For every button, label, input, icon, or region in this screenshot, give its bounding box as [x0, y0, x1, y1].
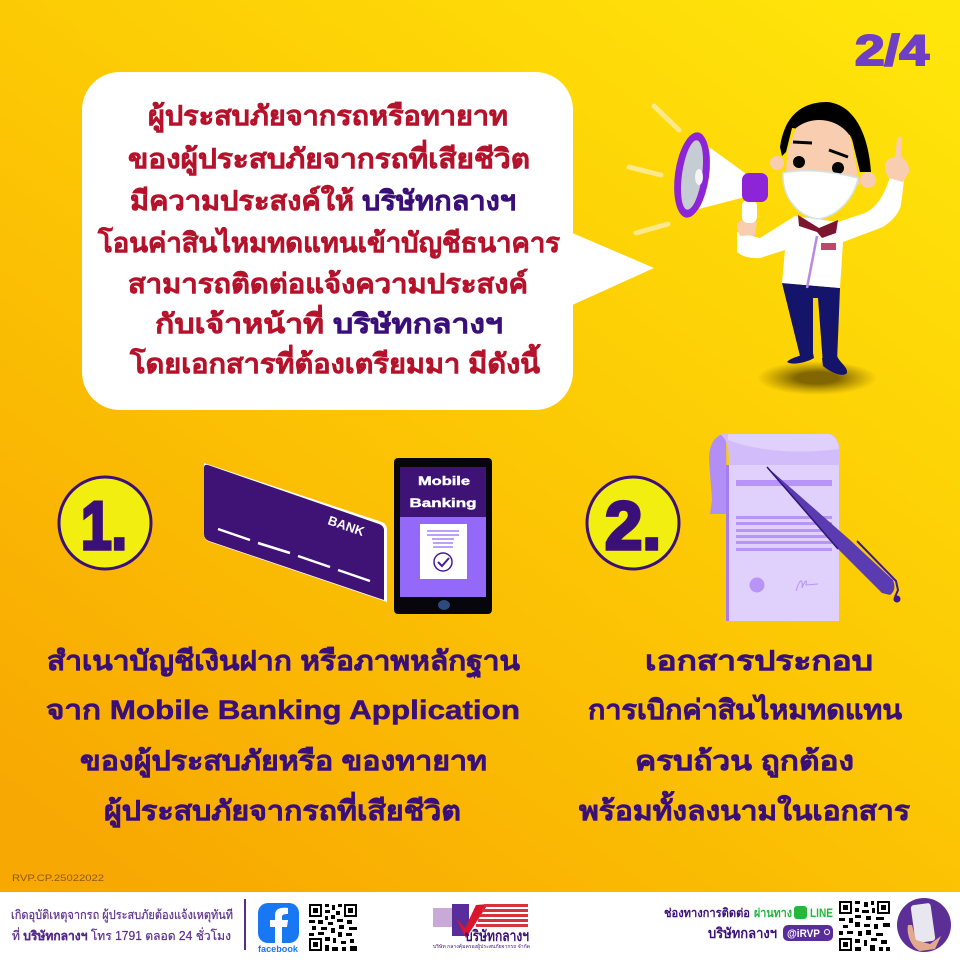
bubble text: สามารถติดต่อแจ้งความประสงค์: [128, 268, 528, 299]
step 1 text: [46, 646, 521, 828]
step 2 badge: 2.: [605, 488, 661, 564]
step 1 text: สำเนาบัญชีเงินฝาก หรือภาพหลักฐาน: [47, 646, 521, 679]
bubble text: โอนค่าสินไหมทดแทนเข้าบัญชีธนาคาร: [97, 226, 561, 259]
footer notice: [11, 908, 233, 943]
shirt and arms: [737, 177, 904, 288]
iRVP pill: [783, 925, 833, 941]
icon: facebook: [258, 903, 299, 954]
megaphone: [737, 219, 757, 236]
step 2 text: เอกสารประกอบ: [645, 646, 873, 676]
bubble text: [97, 101, 561, 379]
reference code: RVP.CP.25022022: [12, 873, 104, 884]
LINE contact: ช่องทางการติดต่อ: [664, 906, 750, 920]
logo: RVP: บริษัท กลางคุ้มครองผู้ประสบภัยจากรถ จำกัด: [433, 943, 530, 950]
icon: man with megaphone: [629, 102, 909, 395]
icon: bank book: [204, 463, 387, 602]
footer notice: ที่ บริษัทกลางฯ โทร 1791 ตลอด 24 ชั่วโมง: [12, 927, 231, 943]
step 2 badge: [587, 477, 679, 569]
icon: phone in hand circle: [897, 898, 951, 952]
trousers and shoes: [782, 283, 840, 364]
step 1 text: ของผู้ประสบภัยหรือ ของทายาท: [80, 746, 487, 778]
footer: [0, 892, 960, 960]
mask: [783, 171, 858, 219]
logo: RVP: บริษัทกลางฯ: [465, 927, 529, 945]
step 1 text: จาก Mobile Banking Application: [46, 695, 520, 725]
icon: phone with mobile banking: Banking: [410, 496, 476, 510]
LINE contact: [664, 906, 833, 941]
icon: document and pen: [709, 434, 900, 621]
bubble text: กับเจ้าหน้าที่ บริษัทกลางฯ: [155, 304, 503, 339]
bubble text: ของผู้ประสบภัยจากรถที่เสียชีวิต: [128, 139, 530, 176]
LINE contact: LINE: [810, 906, 833, 920]
QR code: LINE: [839, 901, 890, 951]
hand with finger: [885, 137, 909, 182]
sound rays: [629, 106, 679, 233]
icon: bank book: BANK: [326, 513, 367, 539]
icon: LINE: [794, 906, 807, 919]
bubble text: โดยเอกสารที่ต้องเตรียมมา มีดังนี้: [129, 343, 541, 379]
step 1 badge: 1.: [81, 488, 127, 564]
step 1 badge: [59, 477, 151, 569]
icon: facebook: facebook: [258, 944, 299, 954]
collar and badge: [798, 215, 838, 238]
QR code: facebook: [309, 904, 357, 951]
speech bubble: [82, 72, 654, 410]
step 1 text: ผู้ประสบภัยจากรถที่เสียชีวิต: [104, 791, 461, 828]
logo: RVP: [433, 904, 530, 950]
icon: phone with mobile banking: Mobile: [418, 474, 470, 488]
icon: phone with mobile banking: [394, 458, 492, 614]
bubble text: มีความประสงค์ให้ บริษัทกลางฯ: [130, 185, 516, 216]
head: [770, 102, 876, 219]
step 2 text: พร้อมทั้งลงนามในเอกสาร: [579, 790, 911, 826]
step 2 text: [579, 646, 911, 826]
footer notice: เกิดอุบัติเหตุจากรถ ผู้ประสบภัยต้องแจ้งเหตุทันที: [11, 908, 233, 923]
step 2 text: การเบิกค่าสินไหมทดแทน: [588, 694, 903, 725]
LINE contact: ผ่านทาง: [754, 906, 792, 920]
bubble text: ผู้ประสบภัยจากรถหรือทายาท: [148, 101, 508, 133]
pen: [767, 467, 894, 595]
LINE contact: บริษัทกลางฯ: [708, 925, 777, 941]
step 2 text: ครบถ้วน ถูกต้อง: [635, 746, 854, 778]
page number: 2/4: [855, 27, 929, 75]
iRVP pill: @iRVP: [787, 928, 820, 940]
